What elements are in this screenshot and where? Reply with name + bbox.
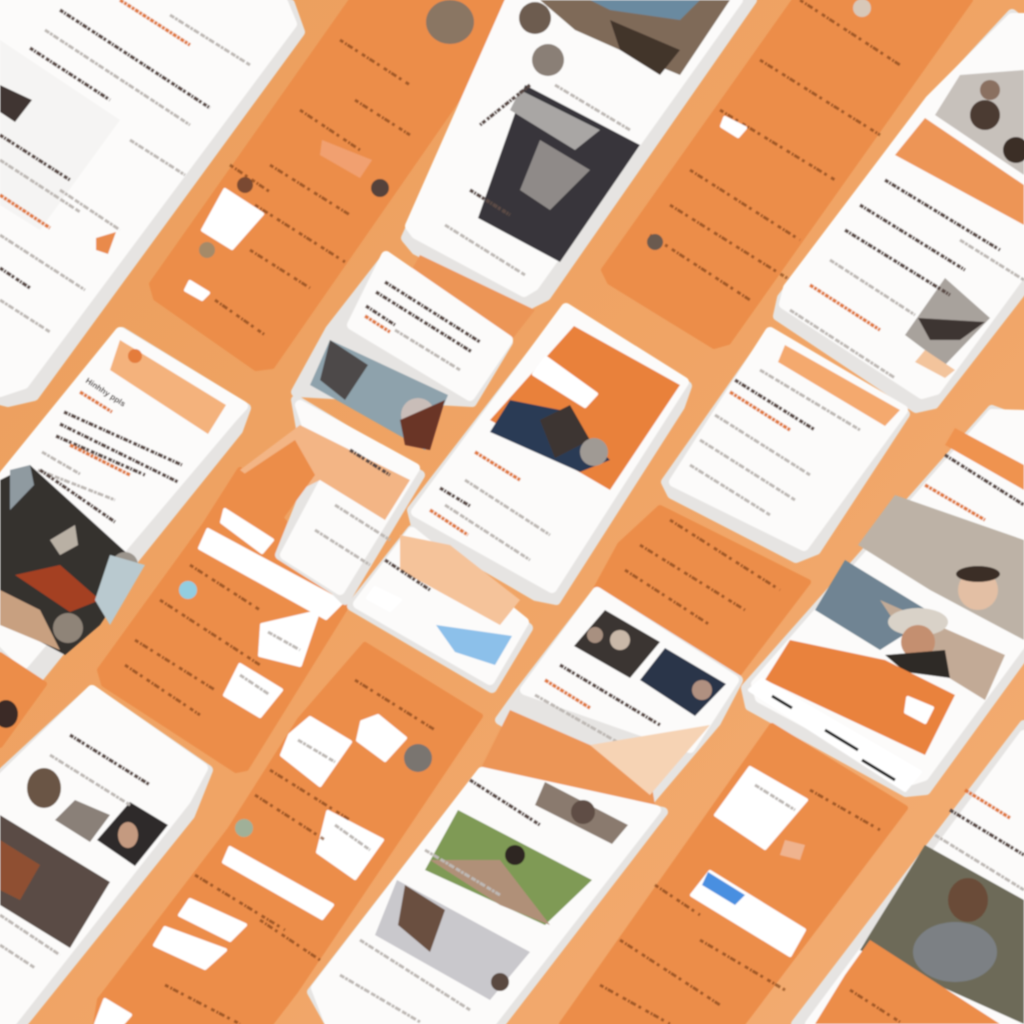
photo: rock animal [860, 845, 1024, 1024]
pill [534, 358, 596, 406]
photo: pair left [574, 610, 660, 678]
photo [490, 400, 610, 472]
photo: crowd [0, 815, 110, 948]
phone: right centre [666, 332, 905, 558]
photo: landscape [425, 810, 592, 925]
photo: portrait [97, 802, 168, 866]
photo: hat [815, 560, 935, 650]
card [203, 190, 262, 248]
phone: bottom right [796, 725, 1024, 1024]
panel: centre top card [296, 255, 535, 450]
phone: top centre [406, 0, 752, 306]
panel: orange list A [152, 0, 526, 368]
phone: top right [778, 14, 1024, 408]
photo: large group [478, 85, 640, 262]
photo: group [0, 465, 140, 655]
photo: rock [375, 880, 530, 1000]
phone: bottom centre [312, 772, 663, 1024]
photo: top strip [540, 0, 730, 75]
photo: sand [858, 495, 1024, 640]
strip [480, 710, 655, 805]
panel: centre stacked card [235, 400, 420, 600]
panel: orange corner left [0, 655, 44, 745]
phone: bottom left [0, 690, 208, 1024]
photo: portraits [935, 70, 1024, 175]
heading: Hinhhy ppls [84, 376, 128, 409]
panel: orange list B [604, 0, 970, 346]
screen orange [490, 326, 680, 490]
phone: centre lower [480, 592, 738, 805]
panel: orange list E [96, 645, 480, 1024]
photo: hat person [905, 278, 990, 365]
photo: pair right [640, 648, 726, 716]
banner [110, 340, 226, 434]
phone: left [0, 332, 246, 678]
card: map [352, 530, 528, 688]
text rows [0, 0, 250, 332]
phone: centre [412, 308, 687, 600]
phone: right [746, 410, 1024, 792]
phone: top left [0, 0, 300, 402]
panel: orange list F [562, 726, 905, 1024]
screen orange [765, 640, 955, 755]
icon: dark blob [0, 700, 18, 728]
photo: small strip [535, 782, 628, 844]
panel: orange list C [100, 470, 350, 770]
photo [310, 340, 448, 450]
panel: orange list D [590, 508, 808, 690]
